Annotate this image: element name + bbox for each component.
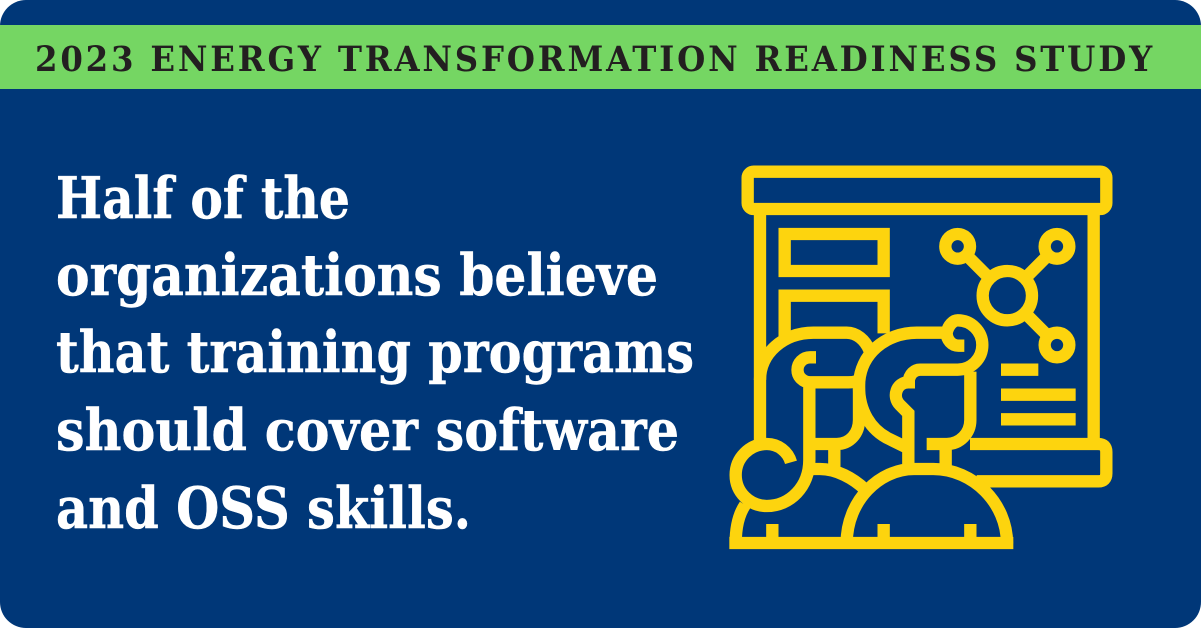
icon part: base line and arm ticks	[729, 524, 1013, 543]
icon part: screen frame	[760, 209, 1106, 481]
text block: main statement: and OSS skills.	[56, 475, 471, 542]
text block: main statement	[56, 165, 694, 542]
text block: main statement: that training programs	[56, 319, 694, 386]
heading: study title: 2023 ENERGY TRANSFORMATION READINESS STUDY	[35, 40, 1155, 80]
text block: main statement: Half of the	[56, 165, 350, 232]
icon part: text lines	[1001, 370, 1076, 419]
icon part: network diagram	[945, 234, 1069, 357]
header band	[0, 25, 1201, 89]
icon part: screen roller	[748, 172, 1106, 209]
text block: main statement: organizations believe	[56, 242, 658, 309]
text block: main statement: should cover software	[56, 397, 679, 464]
icon part: right person	[847, 320, 1007, 543]
icon: two people at a presentation screen	[729, 172, 1106, 543]
icon part: chart blocks	[785, 234, 884, 337]
icon part: left person	[736, 333, 869, 543]
